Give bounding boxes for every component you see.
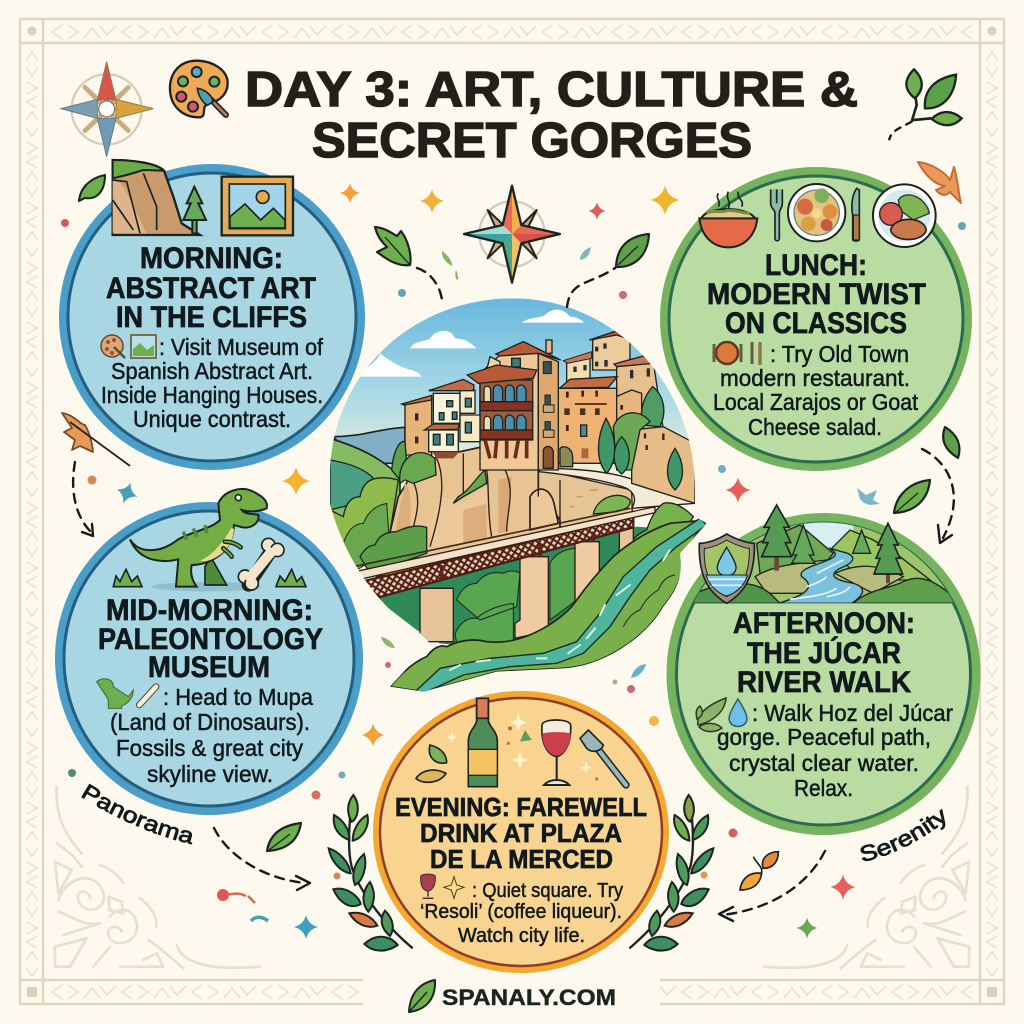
body text: evening: ‘Resoli’ (coffee liqueur). [420, 900, 622, 923]
body text: morning: : Visit Museum of [159, 334, 323, 360]
heading: lunch: LUNCH: [765, 249, 867, 282]
heading: lunch: ON CLASSICS [725, 307, 907, 340]
corner ornament: bottom right [764, 787, 969, 968]
heading: morning: IN THE CLIFFS [116, 301, 307, 334]
heading: mid-morning: MID-MORNING: [106, 594, 313, 627]
pillars [420, 588, 453, 642]
body text: mid-morning [110, 684, 314, 787]
heading: evening [395, 792, 647, 874]
icon: top centre compass [464, 186, 560, 283]
body text: morning: Unique contrast. [133, 406, 291, 432]
icon: dinosaur, bone and grass [113, 489, 306, 591]
dashed arrow: to centre from left leaf [417, 268, 442, 300]
body text: afternoon: : Walk Hoz del Júcar [752, 700, 953, 726]
icon: mini plate and cutlery [714, 342, 760, 365]
dashed arrow: right column [922, 449, 954, 543]
curved label: Panorama: Panorama [81, 784, 192, 844]
icon: compass rose top left [61, 62, 153, 157]
body text: morning: Spanish Abstract Art. [111, 358, 313, 384]
heading: lunch [707, 249, 926, 340]
body text: lunch: : Try Old Town [770, 341, 909, 367]
body text: evening: : Quiet square. Try [472, 879, 624, 902]
bridge [362, 517, 633, 598]
balconies [480, 380, 533, 440]
illustration: river landscape [694, 503, 954, 604]
panel: lunch [660, 167, 972, 471]
trees [641, 387, 664, 427]
icon: bowl, fork, plates and knife [699, 184, 936, 247]
title: DAY 3: ART, CULTURE & [245, 63, 858, 117]
heading: morning [106, 242, 316, 334]
heading: evening: EVENING: FAREWELL [395, 792, 647, 822]
body text: morning [101, 334, 323, 432]
heading: afternoon: THE JÚCAR [747, 636, 901, 670]
body text: evening [420, 879, 624, 947]
body text: lunch: Local Zarajos or Goat [713, 389, 918, 415]
leaves [267, 227, 959, 851]
body text: mid-morning: : Head to Mupa [163, 684, 314, 710]
dashed arrow: serenity [719, 851, 825, 921]
icon: painter's palette [170, 61, 228, 117]
icon: mini palette and picture [101, 335, 156, 358]
heading: afternoon: AFTERNOON: [733, 607, 915, 640]
body text: lunch: Cheese salad. [748, 414, 882, 440]
decorative squiggles [217, 889, 268, 921]
heading: mid-morning: MUSEUM [148, 651, 270, 684]
heading: mid-morning [98, 594, 323, 684]
body text: morning: Inside Hanging Houses. [101, 382, 323, 408]
icon: orange sprig [740, 852, 778, 890]
icon: mini glass and sparkle [421, 874, 464, 898]
dashed arrow: to centre from right leaf [567, 268, 615, 307]
title [245, 63, 858, 168]
body text: evening: Watch city life. [458, 924, 585, 947]
heading: morning: MORNING: [140, 242, 283, 275]
laurel branch right [629, 795, 713, 951]
body text: afternoon: Relax. [794, 775, 853, 801]
icon: mini dinosaur and bone [97, 679, 156, 708]
dashed arrow: panorama [214, 828, 310, 890]
footer logo [409, 980, 616, 1012]
sparkles [113, 183, 880, 939]
curved label: Serenity: Serenity [860, 808, 946, 862]
icon: orange oak leaf left [62, 413, 130, 466]
icon: mini leaf and water drop [696, 698, 747, 732]
icon: wine bottle, glass, fork and leaves [416, 698, 626, 787]
body text: afternoon: crystal clear water. [729, 750, 919, 776]
panel: morning [59, 160, 365, 470]
body text: mid-morning: (Land of Dinosaurs). [110, 709, 310, 735]
retaining wall and road [539, 472, 633, 526]
heading: lunch: MODERN TWIST [707, 278, 926, 311]
wall [632, 427, 695, 503]
icon: leaf sprig top right [889, 69, 962, 139]
white houses [405, 398, 432, 455]
panel: afternoon [666, 505, 980, 835]
decorative dots [61, 219, 966, 880]
icon: orange leaf top right [918, 162, 961, 203]
right block [617, 389, 642, 420]
bushes beside cliffs [392, 441, 407, 480]
illustration: Cuenca hanging houses and bridge [330, 290, 710, 693]
heading: morning: ABSTRACT ART [106, 272, 316, 305]
heading: afternoon: RIVER WALK [737, 666, 911, 699]
footer logo: SPANALY.COM [442, 985, 616, 1010]
title: SECRET GORGES [312, 114, 752, 168]
body text: mid-morning: Fossils & great city [116, 735, 303, 761]
icon: water shield [699, 534, 754, 603]
back buildings [593, 332, 630, 370]
icon: leaf beside morning panel [79, 175, 105, 201]
body text: lunch [713, 341, 918, 440]
heading: evening: DRINK AT PLAZA [420, 818, 622, 848]
main tower [480, 353, 538, 470]
body text: afternoon: gorge. Peaceful path, [717, 724, 931, 750]
forest under bridge [377, 526, 664, 644]
body text: lunch: modern restaurant. [720, 365, 910, 391]
body text: afternoon [717, 700, 953, 801]
dashed arrow: left column [73, 462, 93, 536]
heading: mid-morning: PALEONTOLOGY [98, 623, 323, 656]
icon: cliff, tree and picture [113, 160, 293, 235]
panel: evening [373, 691, 669, 973]
body text: mid-morning: skyline view. [147, 761, 273, 787]
land and river [390, 520, 707, 692]
cliffs [377, 447, 560, 577]
panel: mid-morning [55, 489, 363, 815]
laurel branch left [329, 795, 413, 951]
corner ornament: bottom left [55, 787, 260, 968]
heading: evening: DE LA MERCED [430, 844, 613, 874]
heading: afternoon [733, 607, 915, 699]
